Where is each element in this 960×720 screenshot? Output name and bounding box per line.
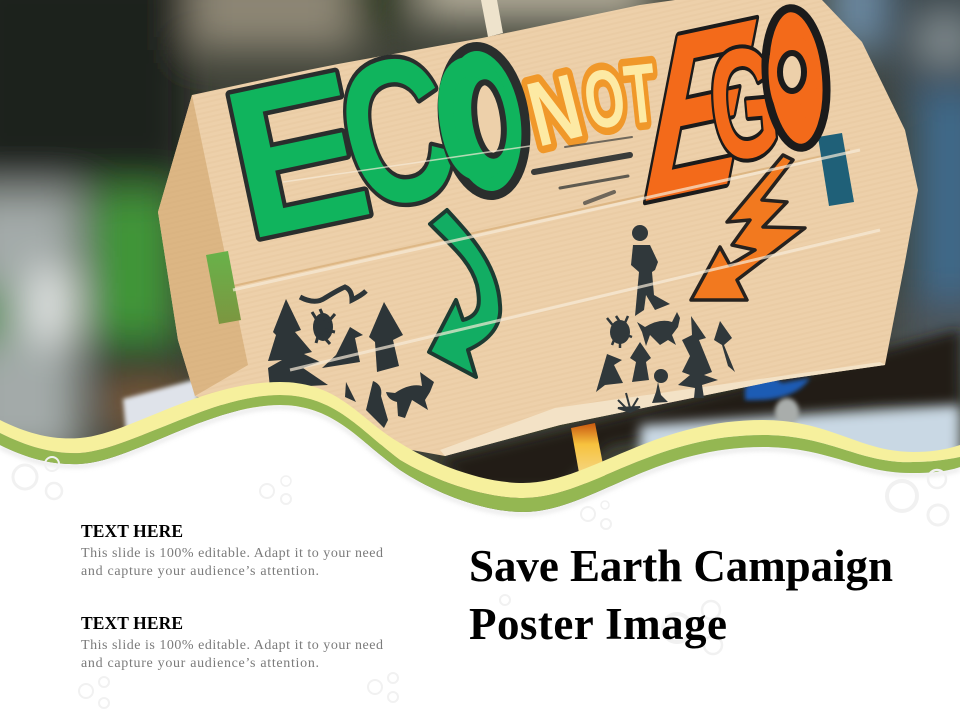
body 2: This slide is 100% editable. Adapt it to your need [81, 638, 383, 653]
decorative bubbles [13, 457, 948, 708]
text block 2 [81, 613, 383, 671]
word NOT [518, 45, 661, 167]
word EGO: G [703, 14, 786, 193]
body 1: and capture your audience’s attention. [81, 564, 319, 579]
pole bottom [571, 423, 606, 484]
word ECO: E [207, 25, 386, 284]
orange lightning arrow [691, 155, 805, 300]
body 1 [81, 546, 383, 579]
right doodles: person and animals [596, 225, 735, 412]
wave shadow [0, 407, 960, 514]
pole top [481, 0, 503, 37]
wave banner [0, 382, 960, 720]
pale crease lines [233, 146, 880, 370]
left doodles: forest and animals [268, 287, 434, 428]
title: Save Earth Campaign [469, 541, 893, 591]
cardboard sign [158, 0, 918, 456]
blurred photo background [0, 0, 960, 520]
title [469, 541, 893, 649]
word NOT: N [518, 55, 592, 167]
green curved arrow [429, 210, 500, 377]
scribbled lines [534, 137, 632, 203]
text block 1 [81, 521, 383, 579]
hand slot right [818, 133, 854, 206]
body 2 [81, 638, 383, 671]
word EGO: O [761, 7, 824, 149]
hand slot left [206, 251, 241, 324]
body 1: This slide is 100% editable. Adapt it to your need [81, 546, 383, 561]
yellow band [0, 382, 960, 498]
word ECO [207, 7, 535, 284]
word NOT: T [620, 45, 661, 142]
heading 1: TEXT HERE [81, 521, 183, 541]
word ECO: O [422, 17, 528, 222]
green band [0, 395, 960, 512]
word ECO: C [317, 7, 476, 255]
heading 2: TEXT HERE [81, 613, 183, 633]
title: Poster Image [469, 599, 727, 649]
wave white fill [0, 405, 960, 720]
body 2: and capture your audience’s attention. [81, 656, 319, 671]
left flap [158, 95, 248, 396]
sign board [158, 0, 918, 456]
word NOT: O [577, 51, 632, 148]
